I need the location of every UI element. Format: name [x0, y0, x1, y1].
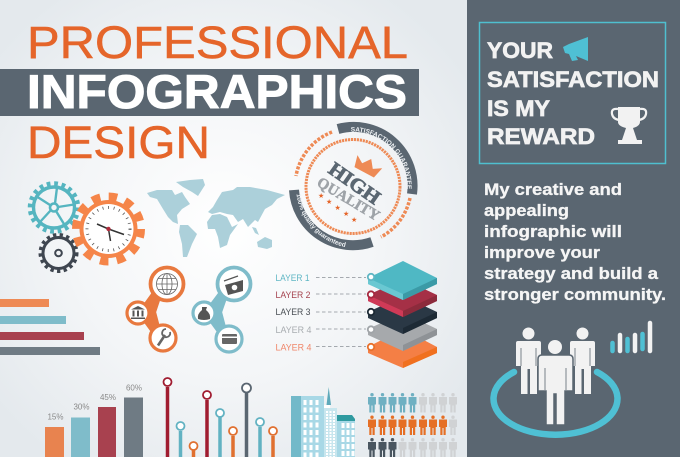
badge: high quality: HIGH — [324, 158, 385, 210]
lollipop chart — [164, 378, 277, 457]
column chart: 60% — [126, 384, 142, 392]
badge: high quality: ★ — [334, 204, 341, 212]
background — [0, 0, 467, 457]
badge: high quality: ★ — [351, 216, 357, 224]
body text: stronger community. — [484, 286, 666, 304]
column chart: 30% — [73, 402, 90, 412]
body text: appealing — [484, 202, 569, 220]
layer labels: LAYER 1 — [276, 273, 310, 284]
title: PROFESSIONAL: PROFESSIONAL — [27, 17, 408, 68]
icon: orange gear clock — [76, 197, 140, 261]
icon: megaphone — [563, 37, 588, 61]
badge: high quality: ★ — [326, 198, 332, 206]
icon: people in ring — [493, 328, 618, 435]
node cluster: orange — [127, 268, 184, 351]
icon: dark gear — [40, 235, 76, 271]
callout box — [480, 22, 666, 164]
horizontal bars — [0, 299, 100, 355]
badge: high quality: ★ — [343, 210, 349, 218]
badge: high quality: 100% quality guaranteed — [296, 194, 346, 247]
column chart: 45% — [100, 393, 116, 402]
icon: signal bars — [612, 323, 650, 351]
column chart: 15% — [47, 412, 64, 422]
body text — [484, 181, 666, 304]
callout box: SATISFACTION — [487, 67, 659, 92]
pictogram: people rows — [368, 393, 457, 457]
title: DESIGN: DESIGN — [27, 117, 210, 168]
badge: high quality: ★ — [318, 192, 324, 200]
body text: infographic will — [484, 223, 622, 241]
title band: INFOGRAPHICS — [27, 65, 407, 118]
layer stack — [368, 261, 437, 368]
layer labels: LAYER 4 — [276, 342, 312, 354]
layer labels: LAYER 3 — [276, 307, 310, 318]
icon: trophy — [612, 107, 646, 144]
layer labels — [276, 273, 374, 354]
callout box: IS MY — [487, 96, 550, 121]
icon: teal gear — [30, 184, 78, 232]
callout box: YOUR — [487, 38, 553, 63]
world map — [147, 179, 285, 257]
city buildings — [291, 387, 355, 457]
node cluster: teal — [193, 268, 250, 352]
layer labels: LAYER 2 — [276, 290, 310, 301]
badge: high quality: QUALITY — [314, 175, 382, 225]
callout box: REWARD — [487, 124, 595, 149]
body text: improve your — [484, 244, 601, 262]
column chart — [45, 384, 143, 457]
layer labels: LAYER 4 — [276, 325, 312, 336]
body text: My creative and — [484, 181, 622, 199]
badge: high quality — [289, 122, 418, 250]
body text: strategy and build a — [484, 265, 659, 283]
panel: right sidebar — [467, 0, 680, 457]
